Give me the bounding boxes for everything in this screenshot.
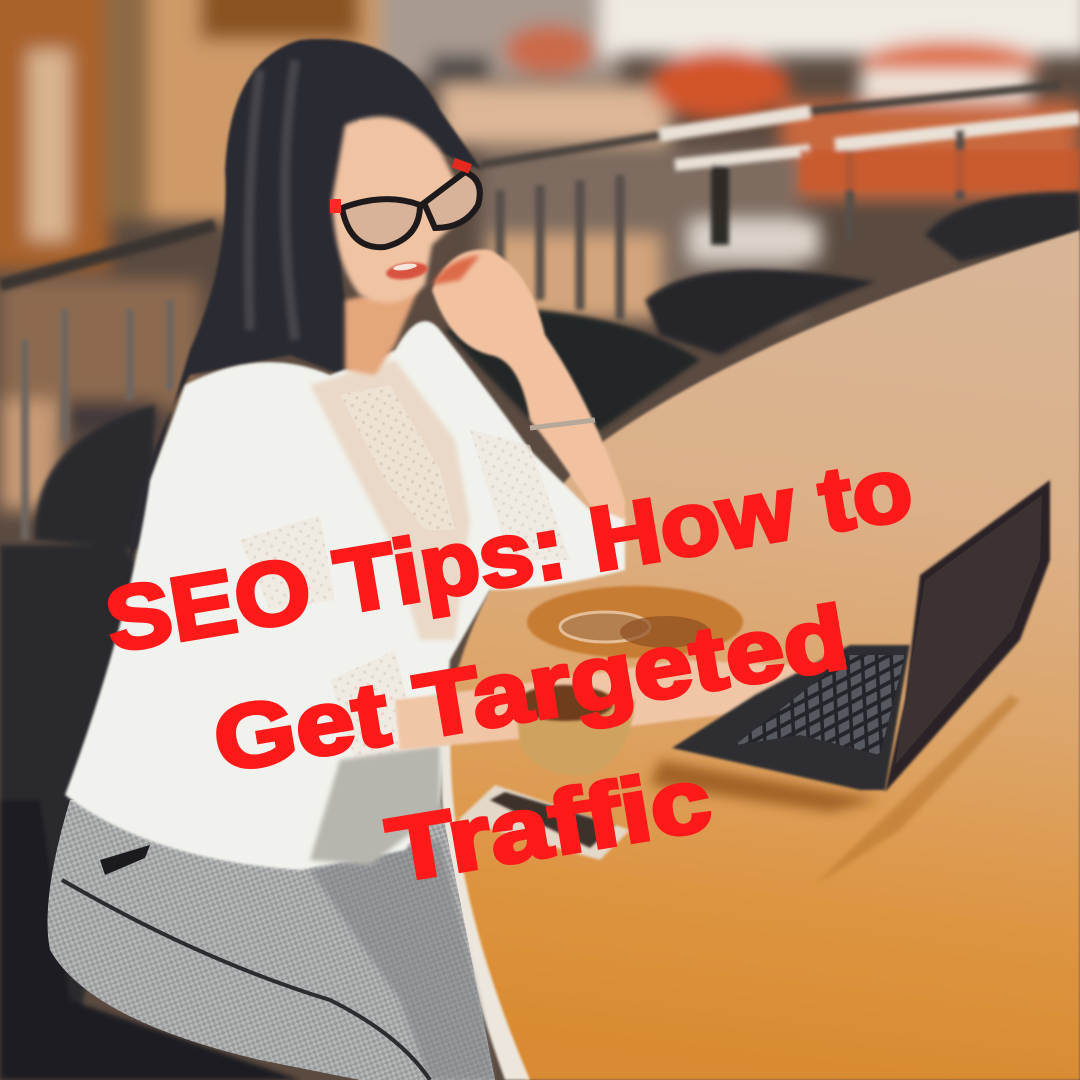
glasses <box>342 172 480 247</box>
title line 1: SEO Tips: How to <box>99 439 919 672</box>
lips <box>385 260 429 282</box>
title line 3: Traffic <box>381 749 718 902</box>
trousers <box>48 800 495 1080</box>
photo: laptop <box>672 480 1050 792</box>
title line 2: Get Targeted <box>207 587 855 792</box>
forearm to keyboard <box>395 660 835 750</box>
hair back <box>128 39 482 578</box>
neck <box>345 285 420 375</box>
title <box>99 439 919 902</box>
hand and forearm raised <box>432 250 625 520</box>
photo: plate, cup, phone <box>458 586 743 860</box>
photo: woman <box>48 39 835 1080</box>
photo: round table <box>441 230 1080 1080</box>
blouse <box>65 321 625 870</box>
face <box>332 117 470 303</box>
